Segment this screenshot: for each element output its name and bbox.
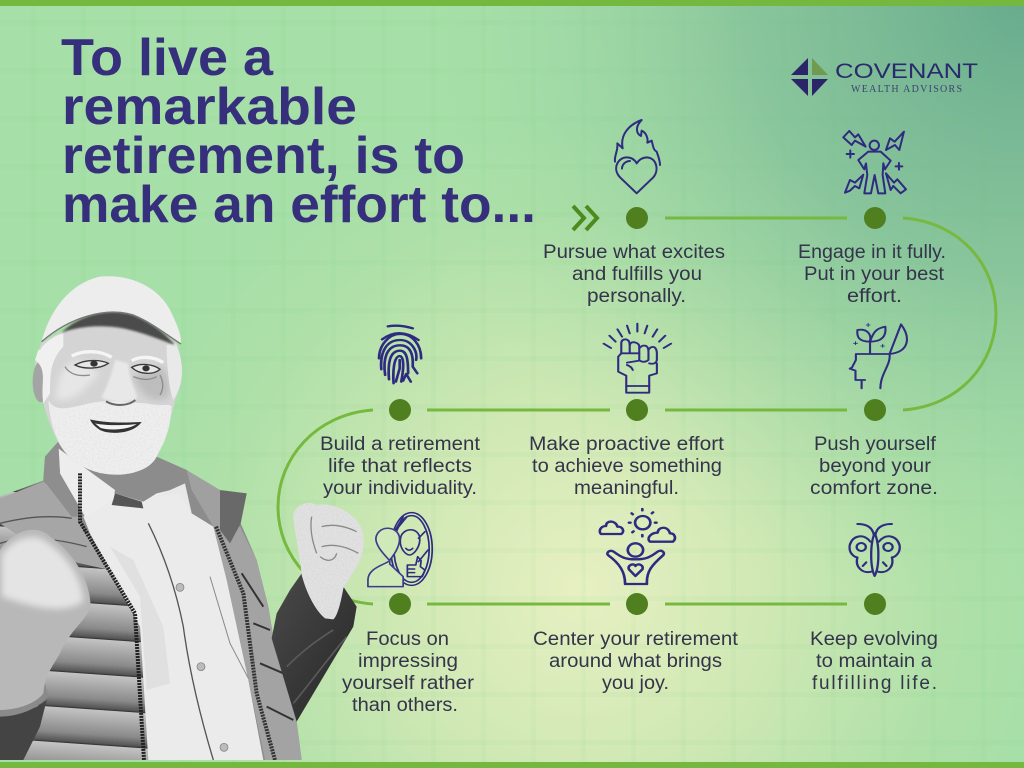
title: make an effort to...	[62, 176, 536, 234]
text: center: you joy.	[602, 673, 669, 694]
icon: head with plant	[850, 323, 907, 388]
text: center: around what brings	[549, 651, 722, 672]
text: engage: Put in your best	[804, 264, 945, 285]
text: make proactive: meaningful.	[574, 478, 679, 499]
icon: person and mirror	[368, 513, 432, 587]
text: pursue: and fulfills you	[572, 264, 702, 285]
text: make proactive: Make proactive effort	[529, 434, 725, 455]
text: keep	[810, 629, 938, 694]
title: retirement, is to	[62, 127, 465, 185]
text: push: Push yourself	[814, 434, 937, 455]
text: focus: Focus on	[366, 629, 449, 650]
icon: flaming heart	[615, 120, 660, 193]
logo: Covenant Wealth Advisors	[791, 58, 978, 96]
text: focus: than others.	[352, 695, 458, 716]
text: engage: Engage in it fully.	[798, 242, 946, 263]
text: build: life that reflects	[328, 456, 472, 477]
logo: Covenant Wealth Advisors: COVENANT	[835, 60, 978, 83]
photo: smiling older man with raised fists	[0, 276, 364, 760]
text: focus: impressing	[358, 651, 458, 672]
text: keep: fulfilling life.	[812, 673, 937, 694]
icon: energised person	[843, 131, 906, 193]
start chevrons	[573, 206, 597, 230]
text: engage	[798, 242, 946, 307]
text: build	[320, 434, 481, 499]
text: make proactive: to achieve something	[532, 456, 722, 477]
text: center	[533, 629, 739, 694]
text: keep: to maintain a	[816, 651, 932, 672]
text: pursue: Pursue what excites	[543, 242, 725, 263]
text: engage: effort.	[847, 286, 902, 307]
text: push	[810, 434, 938, 499]
text: pursue: personally.	[587, 286, 686, 307]
icon: butterfly	[850, 524, 900, 576]
title	[61, 29, 536, 234]
text: build: your individuality.	[323, 478, 477, 499]
text: focus	[342, 629, 475, 716]
icon: fingerprint	[379, 326, 421, 383]
text: push: comfort zone.	[810, 478, 938, 499]
title: remarkable	[62, 78, 357, 136]
text: pursue	[543, 242, 725, 307]
text: center: Center your retirement	[533, 629, 739, 650]
text: keep: Keep evolving	[810, 629, 938, 650]
icon: joyful person with sun and clouds	[600, 509, 675, 584]
icon: raised fist	[604, 324, 671, 393]
text: build: Build a retirement	[320, 434, 481, 455]
timeline path	[278, 218, 996, 604]
text: focus: yourself rather	[342, 673, 475, 694]
timeline dots	[389, 207, 886, 615]
text: push: beyond your	[819, 456, 932, 477]
text: make proactive	[529, 434, 725, 499]
logo: Covenant Wealth Advisors: WEALTH ADVISORS	[851, 84, 962, 95]
title: To live a	[61, 29, 274, 87]
